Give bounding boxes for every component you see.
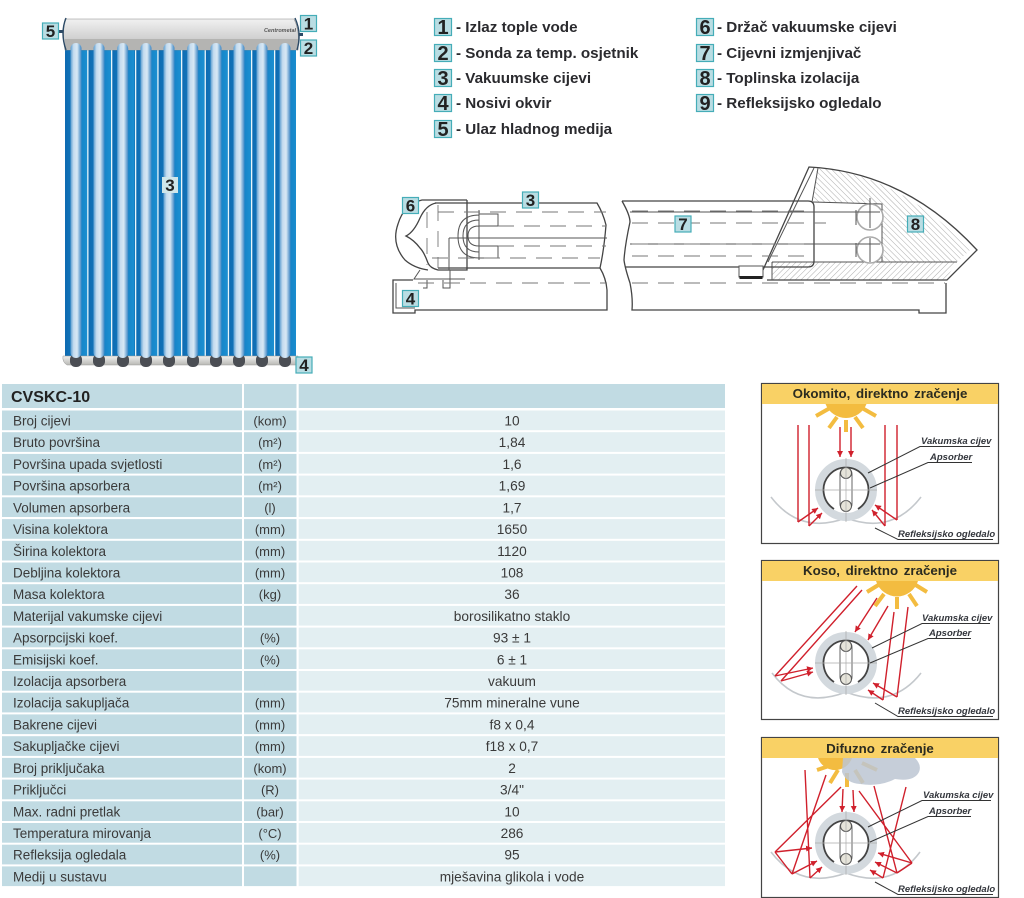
cross-section diagram: left part [393,200,607,313]
row: Bruto površina: Bruto površina [13,435,101,450]
tube outline [622,201,814,267]
manifold [64,19,298,50]
manifold brand text: Centrometal [264,28,297,34]
badge 3: 3 [165,176,175,195]
row: Visina kolektora: (mm) [255,522,285,537]
label: Refleksijsko ogledalo [875,703,995,717]
badge 6: 6 [406,196,415,216]
row: Izolacija sakupljača [2,693,725,712]
row: Apsorpcijski koef.: (%) [260,631,280,646]
vacuum tube cross-section [815,458,877,522]
row: Debljina kolektora: Debljina kolektora [13,566,121,580]
table header [2,384,725,408]
badge 5: 5 [46,22,55,41]
legend item 9: 9 [699,93,711,115]
panel: perpendicular direct radiation [762,384,998,544]
row: Širina kolektora: (mm) [255,544,285,559]
legend item 4 [434,93,551,115]
row: Apsorpcijski koef. [2,628,725,647]
row: Površina apsorbera: 1,69 [499,479,525,494]
housing outline [763,167,977,280]
row: Broj priključaka: (kom) [253,761,287,776]
row: Bruto površina [2,432,725,452]
label: Apsorber: Apsorber [928,806,973,817]
badge 6 [402,196,418,216]
row: Max. radni pretlak: (bar) [256,804,284,819]
vacuum tube cross-section [815,811,877,875]
row: Medij u sustavu: Medij u sustavu [13,869,107,884]
panel header: Okomito, direktno zračenje [793,386,967,401]
badge 8 [908,215,924,234]
badge 4 [296,356,312,375]
badge 4: 4 [299,356,309,375]
row: Broj priključaka: 2 [508,761,516,776]
legend item 5: 5 [437,119,449,141]
label: Apsorber [870,452,974,488]
row: Emisijski koef. [2,649,725,669]
legend item 3 [434,68,591,90]
label: Apsorber [870,806,973,842]
badge 2 [300,39,316,58]
table header: CVSKC-10 [11,389,90,406]
row: Priključci: Priključci [13,783,66,798]
badge 7: 7 [678,215,688,234]
legend item 8: - Toplinska izolacija [717,70,860,87]
row: Temperatura mirovanja: Temperatura mirovanja [13,826,152,841]
row: Širina kolektora: 1120 [497,544,527,559]
badge 4: 4 [406,290,416,308]
row: Širina kolektora: Širina kolektora [13,544,107,559]
row: Broj cijevi: 10 [504,414,520,428]
row: Površina upada svjetlosti [2,454,725,474]
badge 1 [300,14,316,34]
icon: sun [816,404,876,432]
row: Bakrene cijevi [2,714,725,734]
bottom rail [63,356,298,365]
row: Izolacija apsorbera: Izolacija apsorbera [13,674,127,689]
panel header: Difuzno zračenje [826,741,934,756]
label: Vakumska cijev: Vakumska cijev [923,790,994,801]
row: Priključci: 3/4" [500,783,524,798]
row: Površina upada svjetlosti: (m²) [258,457,282,472]
row: Izolacija apsorbera [2,671,725,691]
row: Max. radni pretlak: 10 [504,804,520,819]
label: Vakumska cijev: Vakumska cijev [922,613,993,624]
legend item 3: 3 [437,68,449,90]
badge 3 [162,176,178,195]
row: Visina kolektora: Visina kolektora [13,522,109,537]
row: Volumen apsorbera [2,497,725,517]
legend [434,17,897,141]
pipes [857,204,883,230]
label: Refleksijsko ogledalo: Refleksijsko ogledalo [898,706,995,717]
row: Apsorpcijski koef.: Apsorpcijski koef. [13,631,118,646]
row: Volumen apsorbera: Volumen apsorbera [13,500,131,515]
legend item 9: - Refleksijsko ogledalo [717,95,882,112]
mirror [771,852,920,878]
legend item 4: - Nosivi okvir [456,95,551,112]
legend item 3: - Vakuumske cijevi [456,70,591,87]
panel header [762,738,998,758]
legend item 1: - Izlaz tople vode [456,19,578,36]
row: Refleksija ogledala: Refleksija ogledala [13,848,127,863]
white reflector lines [87,50,275,356]
badge 5 [42,22,58,41]
row: Medij u sustavu: mješavina glikola i vode [440,869,584,884]
legend item 8 [696,68,860,90]
panel: diffuse radiation [762,738,998,898]
specification table [2,384,725,886]
row: Izolacija sakupljača: 75mm mineralne vune [444,696,580,711]
vacuum tube cross-section [815,631,877,695]
tube end caps [70,354,291,367]
label: Vakumska cijev [872,613,993,648]
row: Sakupljačke cijevi [2,736,725,756]
row: Sakupljačke cijevi: Sakupljačke cijevi [13,739,120,754]
row: Broj priključaka [2,758,725,778]
row: Volumen apsorbera: 1,7 [502,500,522,515]
row: Refleksija ogledala [2,845,725,864]
legend item 5: - Ulaz hladnog medija [456,121,613,138]
insulation hatching [813,168,970,262]
legend item 8: 8 [699,68,711,90]
row: Temperatura mirovanja: 286 [501,826,524,841]
row: Sakupljačke cijevi: (mm) [255,739,285,754]
row: Apsorpcijski koef.: 93 ± 1 [493,631,531,646]
row: Masa kolektora: 36 [504,587,520,602]
row: Bruto površina: 1,84 [499,435,526,450]
legend item 2 [434,43,639,65]
row: Visina kolektora: 1650 [497,522,528,537]
label: Apsorber: Apsorber [928,628,973,639]
red rays [775,770,912,878]
row: Površina upada svjetlosti: Površina upada svjetlosti [13,457,162,472]
row: Površina apsorbera [2,476,725,495]
row: Površina apsorbera: Površina apsorbera [13,479,131,494]
panel header [762,561,998,581]
row: Debljina kolektora [2,562,725,582]
label: Vakumska cijev: Vakumska cijev [921,436,992,447]
row: Površina apsorbera: (m²) [258,479,282,494]
legend item 6 [696,17,897,39]
row: Temperatura mirovanja [2,823,725,843]
red rays [775,586,908,700]
legend item 7 [696,43,861,65]
row: Priključci [2,780,725,799]
row: Broj cijevi: (kom) [253,414,287,428]
row: Materijal vakumske cijevi: borosilikatno staklo [454,609,571,624]
label: Apsorber [870,628,973,663]
label: Vakumska cijev [868,436,992,473]
badge 8: 8 [911,215,920,234]
row: Izolacija sakupljača: Izolacija sakupljača [13,696,130,711]
badge 3 [522,191,538,210]
badge 2: 2 [304,39,313,58]
row: Max. radni pretlak [2,801,725,821]
row: Masa kolektora [2,584,725,604]
foot [739,266,763,277]
legend item 6: 6 [699,17,711,39]
legend item 7: - Cijevni izmjenjivač [717,45,861,62]
row: Emisijski koef.: 6 ± 1 [497,652,527,667]
legend item 6: - Držač vakuumske cijevi [717,19,897,36]
row: Broj priključaka: Broj priključaka [13,761,105,776]
row: Emisijski koef.: Emisijski koef. [13,652,99,667]
row: Emisijski koef.: (%) [260,652,280,667]
panel header: Koso, direktno zračenje [803,563,957,578]
badge 4 [402,290,418,308]
row: Max. radni pretlak: Max. radni pretlak [13,804,121,819]
row: Izolacija sakupljača: (mm) [255,696,285,711]
legend item 2: - Sonda za temp. osjetnik [456,45,639,62]
row: Refleksija ogledala: (%) [260,848,280,863]
collector illustration [42,14,316,375]
icon: sun and cloud [817,758,920,787]
row: Izolacija apsorbera: vakuum [488,674,536,689]
row: Debljina kolektora: (mm) [255,566,285,580]
cross-section diagram: right part [402,167,977,313]
legend item 1: 1 [437,17,449,39]
label: Vakumska cijev [868,790,994,827]
badge 7 [675,215,691,234]
vacuum tubes [70,43,290,358]
row: Sakupljačke cijevi: f18 x 0,7 [486,739,538,754]
row: Bruto površina: (m²) [258,435,282,450]
label: Refleksijsko ogledalo: Refleksijsko ogledalo [898,529,995,540]
legend item 4: 4 [437,93,449,115]
badge 3: 3 [526,191,535,210]
row: Materijal vakumske cijevi [2,606,725,626]
row: Refleksija ogledala: 95 [504,848,520,863]
legend item 7: 7 [699,43,711,65]
red rays [798,425,897,526]
row: Površina upada svjetlosti: 1,6 [502,457,522,472]
badge 1: 1 [304,14,313,34]
mirror [772,673,921,698]
legend item 1 [434,17,578,39]
row: Bakrene cijevi: (mm) [255,717,285,732]
row: Medij u sustavu [2,866,725,886]
panel header [762,384,998,404]
row: Materijal vakumske cijevi: Materijal vakumske cijevi [13,609,162,624]
row: Broj cijevi [2,410,725,430]
row: Masa kolektora: Masa kolektora [13,587,105,602]
label: Apsorber: Apsorber [929,452,974,463]
panel: oblique direct radiation [762,560,998,720]
row: Visina kolektora [2,519,725,539]
label: Refleksijsko ogledalo: Refleksijsko ogledalo [898,884,995,895]
mirror [771,497,921,523]
row: Bakrene cijevi: Bakrene cijevi [13,717,97,732]
row: Masa kolektora: (kg) [259,587,281,602]
row: Bakrene cijevi: f8 x 0,4 [490,717,535,732]
row: Debljina kolektora: 108 [501,566,524,580]
row: Broj cijevi: Broj cijevi [13,414,71,428]
icon: sun [867,581,927,609]
blue absorber background [65,48,296,358]
legend item 5 [434,119,613,141]
label: Refleksijsko ogledalo [875,882,995,895]
row: Priključci: (R) [261,783,279,798]
row: Temperatura mirovanja: (°C) [258,826,282,841]
row: Volumen apsorbera: (l) [264,500,276,515]
legend item 9 [696,93,882,115]
legend item 2: 2 [437,43,449,65]
row: Širina kolektora [2,541,725,560]
